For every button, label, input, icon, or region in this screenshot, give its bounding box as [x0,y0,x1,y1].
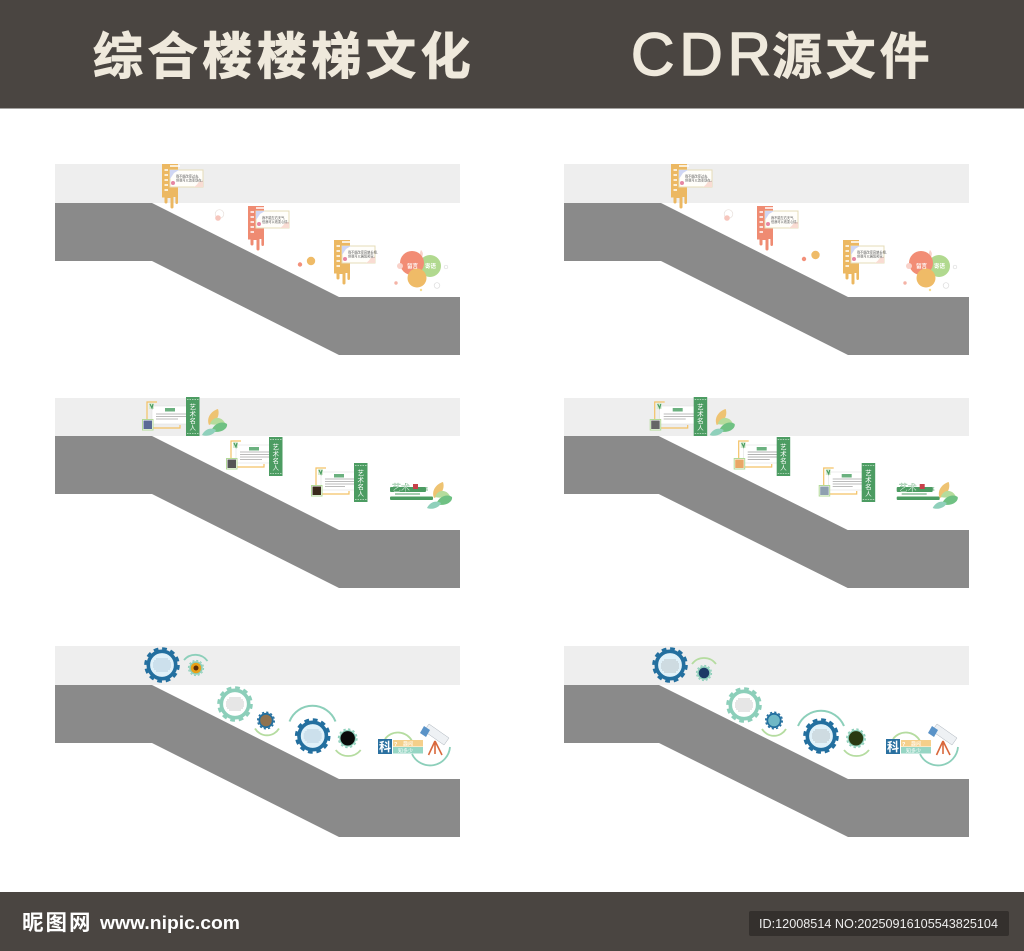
panel: row 1 left [55,164,460,355]
artist card 2: 艺 [272,443,279,451]
card 1: yellow drip: 但我可以改变现在。 [176,178,205,182]
gear 2 teal [728,688,760,722]
gear 3 blue with arc [798,711,844,752]
artist card 3: 艺 [865,469,872,477]
panel: row 3 left [55,646,460,837]
decorative dots [215,210,315,267]
artist card 2 [734,437,790,476]
card 1: yellow drip [162,164,205,208]
artist card 1: 术 [189,409,196,418]
science logo: ? [902,742,906,748]
bubble logo [903,250,957,291]
artist card 2: 人 [780,464,787,472]
telescope icon [928,724,957,755]
leaves icon 2 [427,482,452,509]
science logo [378,733,450,765]
artist card 2: 名 [780,456,787,465]
id box [749,911,1009,936]
bubble logo: 寄语 [425,262,437,270]
artist card 1: 人 [189,424,196,432]
art banner logo: 艺术 [392,482,410,493]
bubble logo [394,250,448,291]
artist card 2: 术 [780,449,787,458]
card 3: yellow drip: 但我可以展现笑容。 [348,254,377,258]
panel: row 1 right [564,164,969,355]
science logo: 科 [887,739,899,754]
artist card 2: 艺 [780,443,787,451]
card 2: coral drip: 但我可以改变心情。 [262,219,291,224]
panel: row 3 right [564,646,969,837]
leaves icon 2 [933,482,958,509]
artist card 1: 艺 [189,403,196,411]
card 2: coral drip [757,206,800,250]
card 3: yellow drip: 我不能改变容貌长相, [348,250,378,254]
artist card 3: 艺 [357,469,364,477]
watermark logo: 昵图网 [22,906,93,937]
staircase [55,436,460,588]
card 3: yellow drip: 但我可以展现笑容。 [857,254,886,258]
artist card 3: 名 [357,482,364,491]
card 1: yellow drip: 但我可以改变现在。 [685,178,714,182]
science logo [886,733,958,765]
artist card 2: 人 [272,464,279,472]
science logo: 科 [379,739,391,754]
staircase [564,203,969,355]
card 3: yellow drip [843,240,887,284]
panel: row 2 left [55,397,460,588]
header bar [0,0,1024,108]
science logo: 趣闻 [911,740,921,748]
staircase [55,685,460,837]
wall band [564,646,969,685]
photo dial 1 with arc [184,655,208,676]
title right: CDR [631,21,776,88]
art banner logo [390,482,433,500]
card 3: yellow drip: 我不能改变容貌长相, [857,250,887,254]
art banner logo: 走进 [927,486,935,492]
photo dial 3 with arc [844,729,869,756]
title right: 源文件 [772,17,933,89]
card 2: coral drip: 我不能左右天气, [262,215,285,220]
artist card 3: 人 [357,490,364,498]
id box: ID:12008514 NO:20250916105543825104 [759,917,998,931]
science logo: 趣闻 [403,740,413,748]
title left: 综合楼楼梯文化 [93,17,475,89]
card 1: yellow drip [671,164,714,208]
wall band [564,398,969,436]
wall band [55,398,460,436]
card 2: coral drip [248,206,291,250]
staircase [55,203,460,355]
card 3: yellow drip [334,240,378,284]
artist card 3: 人 [865,490,872,498]
art banner logo: 艺术 [899,482,917,493]
wall band [55,646,460,685]
artist card 2 [226,437,282,476]
science logo: ? [394,742,398,748]
wall band [55,164,460,203]
photo dial 2 with arc [762,712,786,736]
photo dial 3 with arc [336,729,361,756]
footer bar [0,892,1024,951]
artist card 3: 名 [865,482,872,491]
leaves icon 1 [202,409,227,436]
title right [631,17,933,89]
telescope icon [420,724,449,755]
artist card 3: 术 [865,475,872,484]
artist card 1: 人 [697,424,704,432]
gear 1 blue [654,648,686,682]
photo dial 1 with arc [692,658,716,680]
artist card 1: 艺 [697,403,704,411]
staircase [564,685,969,837]
artist card 2: 名 [272,456,279,465]
panel: row 2 right [564,397,969,588]
artist card 1: 名 [697,416,704,425]
gear 2 teal [218,688,252,720]
decorative dots [724,210,820,261]
bubble logo: 留言 [407,262,419,270]
bubble logo: 留言 [916,262,928,270]
artist card 1 [142,397,200,436]
card 1: yellow drip: 我不能改变过去, [685,174,708,178]
watermark url: www.nipic.com [99,913,240,933]
science logo: 知多少 [398,748,413,754]
artist card 1: 术 [697,409,704,418]
artist card 3 [312,463,368,502]
artist card 1: 名 [189,416,196,425]
art banner logo: 走进 [420,486,428,492]
artist card 3 [819,463,875,502]
artist card 1 [650,397,707,436]
gear 1 blue [146,648,178,682]
science logo: 知多少 [906,748,921,754]
bubble logo: 寄语 [934,262,946,270]
leaves icon 1 [710,409,735,436]
photo dial 2 with arc [255,712,279,735]
card 2: coral drip: 但我可以改变心情。 [771,219,800,224]
staircase [564,436,969,588]
art banner logo [897,482,940,500]
card 2: coral drip: 我不能左右天气, [771,215,794,220]
card 1: yellow drip: 我不能改变过去, [176,174,199,178]
artist card 3: 术 [357,475,364,484]
artist card 2: 术 [272,449,279,458]
gear 3 blue with arc [290,706,336,752]
wall band [564,164,969,203]
